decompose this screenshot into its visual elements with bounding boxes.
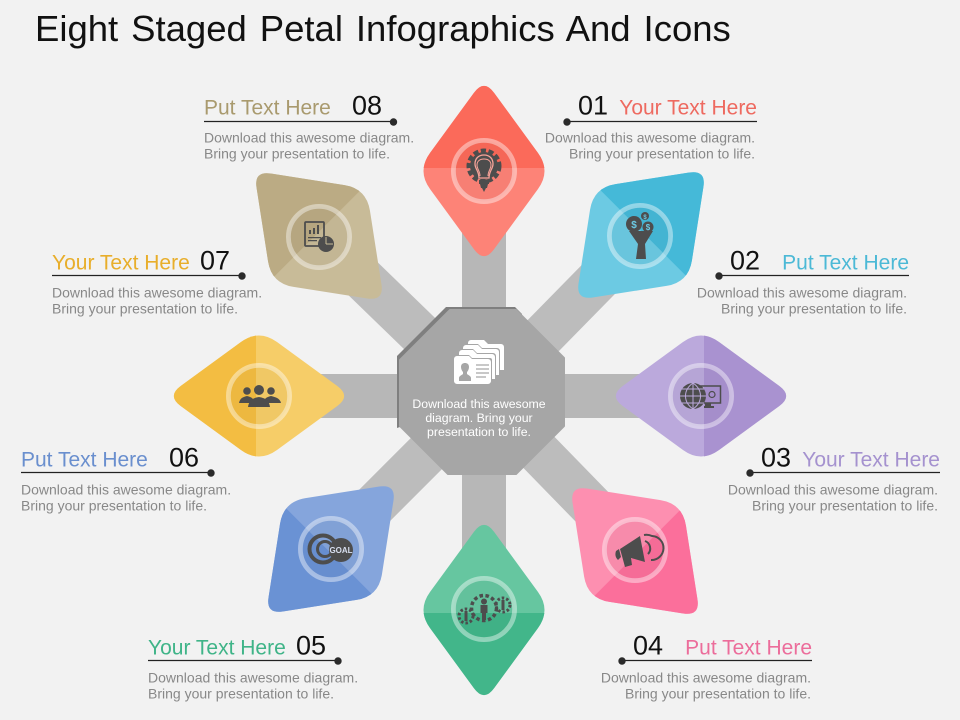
petal 02: blue bbox=[578, 172, 704, 298]
center text: Download this awesome bbox=[412, 397, 546, 411]
icon: goal bbox=[310, 536, 353, 562]
icon: money funnel: $ bbox=[631, 220, 637, 231]
label 08 bbox=[204, 90, 414, 162]
label 07: Download this awesome diagram. bbox=[52, 284, 262, 300]
petal 08: tan bbox=[256, 173, 382, 299]
label 07: 07 bbox=[200, 246, 230, 276]
icon: people gears bbox=[459, 596, 510, 623]
icon: money funnel: $ bbox=[643, 215, 647, 221]
label 07: Your Text Here bbox=[52, 252, 190, 274]
label 05: Bring your presentation to life. bbox=[148, 686, 334, 702]
label 06: Bring your presentation to life. bbox=[21, 498, 207, 514]
label 02: Download this awesome diagram. bbox=[697, 284, 907, 300]
icon: megaphone bbox=[615, 535, 664, 567]
label 01: Download this awesome diagram. bbox=[545, 130, 755, 146]
petal 04: pink bbox=[572, 488, 698, 614]
label 03 bbox=[728, 442, 940, 514]
petal 01: red bbox=[424, 86, 544, 256]
label 06: 06 bbox=[169, 442, 199, 472]
label 05: Download this awesome diagram. bbox=[148, 670, 358, 686]
label 08: Download this awesome diagram. bbox=[204, 130, 414, 146]
petal 03: purple bbox=[616, 336, 786, 456]
connector spokes bbox=[259, 170, 701, 610]
label 08: Bring your presentation to life. bbox=[204, 146, 390, 162]
label 05 bbox=[148, 630, 358, 702]
icon: id cards bbox=[454, 340, 504, 384]
label 02: 02 bbox=[730, 246, 760, 276]
title: Eight Staged Petal Infographics And Icons bbox=[35, 8, 731, 49]
label 02: Put Text Here bbox=[782, 252, 909, 274]
label 04: Bring your presentation to life. bbox=[625, 686, 811, 702]
label 04: Put Text Here bbox=[685, 636, 812, 660]
label 06 bbox=[21, 442, 231, 514]
icon: goal: GOAL bbox=[329, 546, 353, 555]
label 01 bbox=[545, 90, 757, 162]
label 06: Download this awesome diagram. bbox=[21, 482, 231, 498]
label 03: Bring your presentation to life. bbox=[752, 498, 938, 514]
label 06: Put Text Here bbox=[21, 448, 148, 472]
label 08: Put Text Here bbox=[204, 96, 331, 120]
label 01: Bring your presentation to life. bbox=[569, 146, 755, 162]
label 03: 03 bbox=[761, 442, 791, 472]
icon: report and pie bbox=[305, 222, 334, 252]
label 04: Download this awesome diagram. bbox=[601, 670, 811, 686]
petal 06: blue bbox=[268, 486, 394, 612]
label 07: Bring your presentation to life. bbox=[52, 300, 238, 316]
label 02 bbox=[697, 246, 909, 316]
label 08: 08 bbox=[352, 90, 382, 120]
label 07 bbox=[52, 246, 262, 316]
center text: diagram. Bring your bbox=[425, 411, 533, 425]
icon: globe and screen bbox=[680, 383, 720, 409]
label 03: Download this awesome diagram. bbox=[728, 482, 938, 498]
icon: team bbox=[239, 385, 281, 407]
icon: money funnel bbox=[626, 212, 654, 259]
icon: gear bulb bbox=[469, 151, 499, 192]
label 04 bbox=[601, 630, 812, 702]
label 02: Bring your presentation to life. bbox=[721, 300, 907, 316]
central octagon bbox=[397, 307, 564, 474]
icon: money funnel: $ bbox=[646, 223, 651, 232]
petal 07: yellow bbox=[174, 336, 344, 456]
label 01: 01 bbox=[578, 90, 608, 120]
center text: presentation to life. bbox=[427, 425, 531, 439]
label 03: Your Text Here bbox=[802, 448, 940, 472]
label 05: Your Text Here bbox=[148, 636, 286, 660]
petal 05: green bbox=[424, 525, 544, 695]
label 04: 04 bbox=[633, 630, 663, 660]
label 05: 05 bbox=[296, 630, 326, 660]
label 01: Your Text Here bbox=[619, 96, 757, 120]
